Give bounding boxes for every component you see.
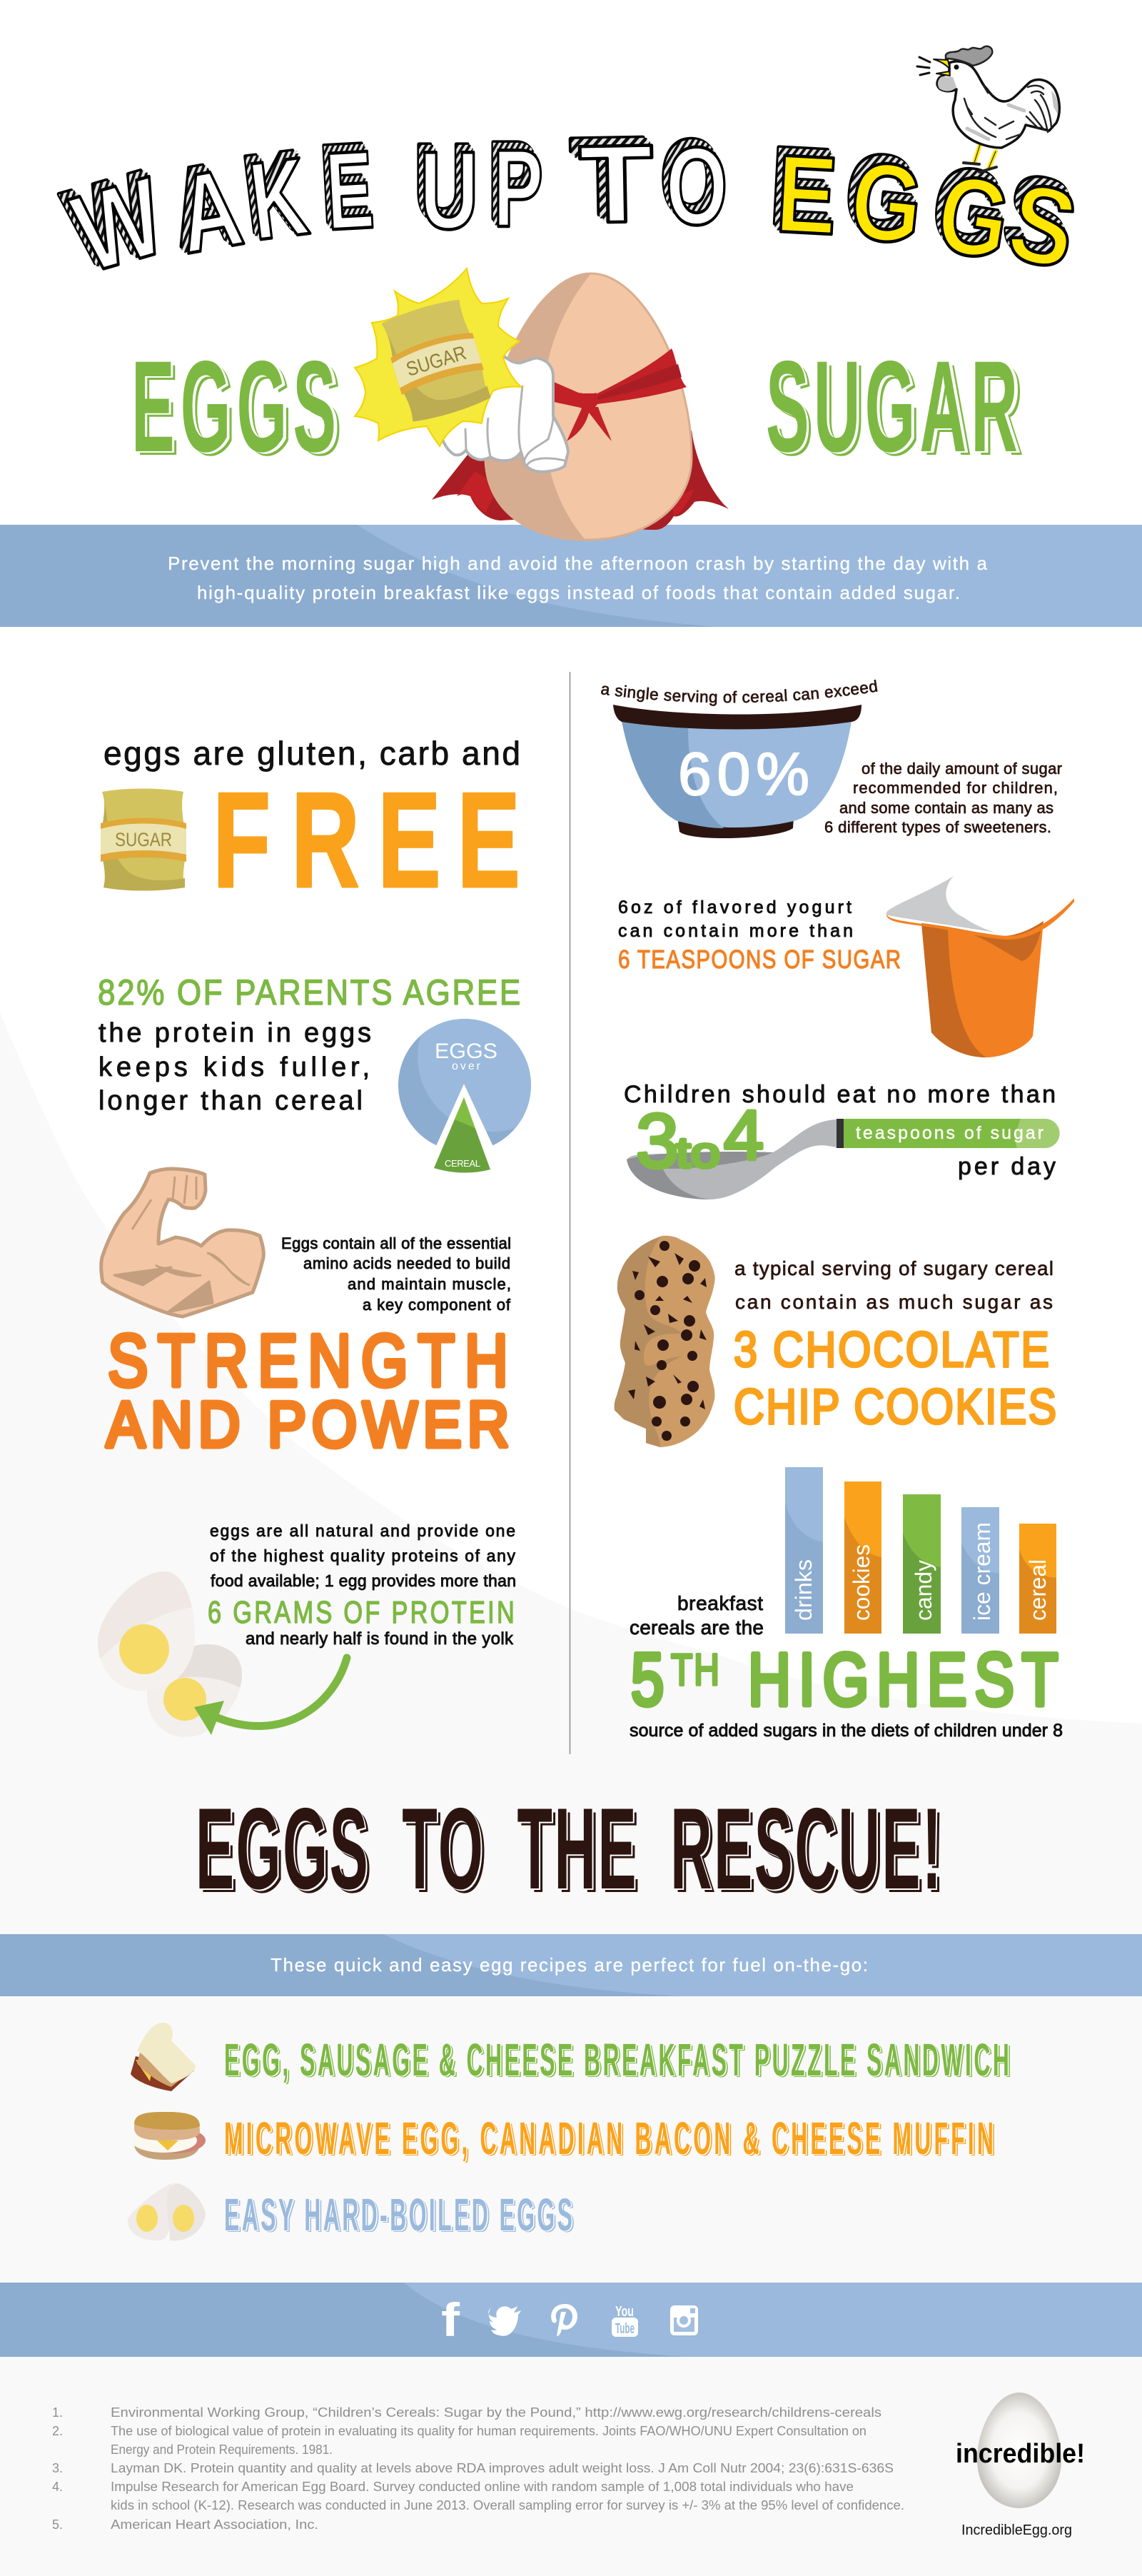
icon: spoon with 3 to 4: to — [676, 1129, 720, 1177]
banner: social icons — [0, 2283, 1142, 2357]
chart: added sugar bars — [785, 1467, 1056, 1634]
title: wake up to eggs: O — [662, 119, 724, 242]
text: typical serving — [734, 1257, 1053, 1313]
banner: social icons: f — [441, 2293, 460, 2346]
title: wake up to eggs: W — [61, 154, 177, 296]
title: wake up to eggs: G — [924, 141, 1013, 275]
title: wake up to eggs: W — [52, 149, 168, 291]
chart: added sugar bars: cereal — [1025, 1559, 1051, 1621]
heading: easy hard-boiled eggs: EASY HARD-BOILED EGGS — [224, 2189, 572, 2240]
title: wake up to eggs: E — [318, 119, 371, 246]
title: wake up to eggs: K — [241, 132, 312, 261]
heading: sugar: SUGAR — [768, 336, 1021, 481]
title: wake up to eggs — [52, 114, 1088, 298]
chart: eggs over cereal pie: over — [452, 1060, 481, 1072]
footnotes: 1. — [52, 2405, 63, 2420]
heading: sugar: SUGAR — [766, 335, 1018, 479]
title: wake up to eggs: O — [666, 124, 728, 248]
heading: 5th highest: 5 — [631, 1638, 664, 1721]
icon: flexed arm — [101, 1169, 263, 1317]
text: daily amount of sugar — [824, 760, 1062, 836]
heading: strength and power — [106, 1319, 509, 1461]
footnotes: kids in school (K-12). Research was conducted in June 2013. Overall sampling error for survey is +/- 3% at the 95% level of confidence. — [111, 2498, 904, 2512]
banner: social icons: Tube — [615, 2321, 635, 2337]
footnotes: Energy and Protein Requirements. 1981. — [111, 2442, 333, 2457]
text: essential amino acids — [281, 1234, 511, 1314]
text: protein keeps kids fuller: the protein in eggs — [98, 1018, 371, 1048]
footnotes — [52, 2405, 904, 2532]
heading: egg sausage cheese sandwich: EGG, SAUSAGE & CHEESE BREAKFAST PUZZLE SANDWICH — [226, 2036, 1011, 2087]
footnotes: 2. — [52, 2424, 63, 2438]
title: wake up to eggs: U — [414, 121, 473, 244]
text: essential amino acids: amino acids needed to build — [303, 1254, 510, 1272]
title: wake up to eggs: U — [415, 123, 475, 246]
text: essential amino acids: Eggs contain all of the essential — [281, 1234, 511, 1252]
chart: added sugar bars: ice cream — [969, 1522, 995, 1621]
title: wake up to eggs: G — [926, 144, 1014, 277]
heading: microwave egg muffin: MICROWAVE EGG, CANADIAN BACON & CHEESE MUFFIN — [224, 2113, 994, 2164]
heading: eggs to the rescue: EGGS TO THE RESCUE! — [196, 1785, 941, 1913]
footnotes: 4. — [52, 2480, 63, 2494]
title: wake up to eggs: A — [166, 142, 248, 275]
title: wake up to eggs: P — [487, 119, 538, 243]
banner: recipes intro — [0, 1934, 1142, 1996]
logo: incredible egg: incredible! — [956, 2439, 1085, 2469]
title: wake up to eggs: A — [169, 145, 251, 277]
footnotes: Impulse Research for American Egg Board. Survey conducted online with random sample of 1,008 total individuals who have — [111, 2480, 854, 2494]
text: typical serving: can contain as much sugar as — [735, 1291, 1053, 1313]
text: flavored yogurt: 6oz of flavored yogurt — [618, 897, 852, 917]
illustration: superhero egg punching sugar: SUGAR — [403, 341, 469, 381]
text: protein keeps kids fuller — [98, 1018, 371, 1116]
footnotes: American Heart Association, Inc. — [111, 2517, 318, 2532]
title: wake up to eggs: G — [839, 130, 922, 260]
text: eggs are gluten, carb and: eggs are gluten, carb and — [103, 735, 520, 772]
heading: easy hard-boiled eggs: EASY HARD-BOILED EGGS — [226, 2190, 575, 2242]
title: wake up to eggs: E — [323, 127, 377, 253]
text: per day: per day — [958, 1153, 1056, 1180]
banner: intro: high-quality protein breakfast like eggs instead of foods that contain added sugar. — [197, 582, 960, 603]
banner: intro — [0, 525, 1142, 627]
heading: 3 chocolate chip cookies: CHIP COOKIES — [734, 1378, 1056, 1434]
logo: incredible egg — [956, 2393, 1085, 2538]
heading: eggs: EGGS — [133, 336, 340, 481]
text: breakfast cereals are the — [630, 1592, 764, 1639]
title: wake up to eggs: S — [997, 155, 1085, 289]
banner: recipes intro: These quick and easy egg recipes are perfect for fuel on-the-go: — [271, 1954, 868, 1976]
illustration: superhero egg punching sugar — [355, 268, 729, 543]
text: daily amount of sugar: of the daily amount of sugar — [861, 760, 1062, 778]
icon: spoon with 3 to 4: teaspoons of sugar — [856, 1123, 1044, 1143]
title: wake up to eggs: T — [575, 119, 651, 243]
icon: rooster — [917, 46, 1059, 172]
text: children should eat: Children should eat no more than — [624, 1081, 1056, 1108]
text: natural protein: food available; 1 egg provides more than — [211, 1571, 516, 1590]
title: wake up to eggs: E — [319, 121, 373, 248]
title: wake up to eggs: G — [929, 150, 1018, 283]
footnotes: Layman DK. Protein quantity and quality at levels above RDA improves adult weight loss. J Am Coll Nutr 2004; 23(6):631S-636S — [111, 2461, 894, 2475]
arrow: pointing to yolk — [194, 1658, 347, 1735]
text: protein keeps kids fuller: keeps kids fuller, — [98, 1052, 370, 1082]
title: wake up to eggs: O — [660, 116, 722, 240]
title: wake up to eggs: K — [243, 135, 314, 263]
footnotes: The use of biological value of protein in evaluating its quality for human requirements. Joints FAO/WHO/UNU Expert Consultation on — [111, 2424, 866, 2438]
title: wake up to eggs: P — [493, 127, 543, 251]
text: natural protein — [210, 1521, 516, 1590]
heading: eggs to the rescue: EGGS TO THE RESCUE! — [197, 1786, 943, 1915]
heading: 3 chocolate chip cookies — [734, 1321, 1056, 1434]
heading: eggs: EGGS — [136, 338, 342, 483]
heading: microwave egg muffin: MICROWAVE EGG, CANADIAN BACON & CHEESE MUFFIN — [226, 2114, 996, 2165]
title: wake up to eggs: S — [999, 159, 1087, 293]
icon: spoon with 3 to 4: 3 — [636, 1097, 679, 1184]
heading: 6 teaspoons of sugar: 6 TEASPOONS OF SUGAR — [618, 945, 901, 974]
title: wake up to eggs: A — [162, 138, 243, 271]
heading: free: FREE — [213, 765, 520, 916]
text: daily amount of sugar: 6 different types of sweeteners. — [824, 818, 1051, 836]
text: breakfast cereals are the: cereals are the — [630, 1616, 764, 1639]
chart: added sugar bars: candy — [911, 1560, 936, 1621]
icon: sugar bag: SUGAR — [115, 829, 172, 850]
title: wake up to eggs: P — [489, 121, 540, 245]
title: wake up to eggs: U — [420, 129, 479, 252]
icon: cereal bowl 60%: 60% — [678, 740, 809, 807]
title: wake up to eggs: W — [58, 152, 174, 294]
text: typical serving: a typical serving of sugary cereal — [734, 1257, 1053, 1279]
title: wake up to eggs: U — [418, 126, 477, 249]
text: essential amino acids: a key component of — [363, 1296, 511, 1314]
title: wake up to eggs: S — [995, 151, 1083, 286]
heading: egg sausage cheese sandwich: EGG, SAUSAGE & CHEESE BREAKFAST PUZZLE SANDWICH — [224, 2034, 1009, 2086]
icon: cereal bowl 60% — [613, 705, 861, 838]
text: daily amount of sugar: recommended for children, — [853, 779, 1058, 797]
footnotes: 5. — [52, 2517, 63, 2532]
title: wake up to eggs: E — [771, 129, 838, 256]
icon: egg muffin — [131, 2112, 206, 2160]
text: daily amount of sugar: and some contain as many as — [839, 799, 1053, 817]
title: wake up to eggs: E — [773, 132, 840, 258]
heading: microwave egg muffin: MICROWAVE EGG, CANADIAN BACON & CHEESE MUFFIN — [226, 2113, 995, 2165]
logo: incredible egg: IncredibleEgg.org — [961, 2522, 1072, 2538]
heading: eggs to the rescue: EGGS TO THE RESCUE! — [199, 1788, 945, 1917]
heading: egg sausage cheese sandwich: EGG, SAUSAGE & CHEESE BREAKFAST PUZZLE SANDWICH — [226, 2035, 1011, 2086]
title: wake up to eggs: E — [767, 124, 834, 251]
title: wake up to eggs: K — [239, 129, 309, 258]
icon: spoon with 3 to 4 — [627, 1096, 1059, 1199]
title: wake up to eggs: P — [491, 124, 541, 248]
chart: eggs over cereal pie: EGGS — [435, 1040, 497, 1063]
chart: eggs over cereal pie — [398, 1019, 531, 1172]
footnotes: 3. — [52, 2461, 63, 2475]
heading: 6 grams of protein: 6 GRAMS OF PROTEIN — [208, 1595, 515, 1630]
title: wake up to eggs: E — [321, 124, 375, 251]
heading: strength and power: AND POWER — [106, 1389, 509, 1461]
title: wake up to eggs: E — [769, 126, 836, 253]
title: wake up to eggs: G — [843, 135, 926, 266]
text: single serving curved: a single serving of cereal can exceed — [601, 680, 878, 706]
title: wake up to eggs: T — [572, 116, 648, 241]
icon: halved eggs — [98, 1571, 242, 1737]
heading: sugar: SUGAR — [770, 338, 1024, 483]
text: source of added sugars: source of added sugars in the diets of children under 8 — [630, 1721, 1063, 1741]
heading: strength and power: STRENGTH — [108, 1319, 508, 1402]
chart: added sugar bars: cookies — [849, 1544, 874, 1621]
heading: eggs: EGGS — [131, 335, 336, 479]
title: wake up to eggs: A — [163, 140, 245, 273]
title: wake up to eggs: T — [569, 114, 646, 238]
footnotes: Environmental Working Group, “Children’s Cereals: Sugar by the Pound,” http://www.ewg.org/research/childrens-cereals — [111, 2405, 881, 2420]
chart: added sugar bars: drinks — [791, 1559, 817, 1621]
text: flavored yogurt — [618, 897, 853, 941]
text: breakfast cereals are the: breakfast — [677, 1592, 763, 1614]
text: flavored yogurt: can contain more than — [618, 921, 853, 941]
text: protein keeps kids fuller: longer than cereal — [98, 1086, 363, 1116]
text: essential amino acids: and maintain muscle, — [348, 1275, 511, 1293]
heading: 5th highest: HIGHEST — [748, 1638, 1058, 1721]
title: wake up to eggs: G — [928, 147, 1016, 280]
heading: 3 chocolate chip cookies: 3 CHOCOLATE — [734, 1321, 1049, 1377]
text: half in the yolk: and nearly half is found in the yolk — [246, 1629, 514, 1649]
chart: eggs over cereal pie: CEREAL — [445, 1158, 480, 1169]
title: wake up to eggs: W — [54, 150, 171, 292]
heading: 5th highest: TH — [671, 1645, 719, 1694]
icon: yogurt cup — [886, 876, 1074, 1057]
title: wake up to eggs: K — [237, 128, 308, 256]
banner: intro: Prevent the morning sugar high and avoid the afternoon crash by starting the day with a — [168, 553, 988, 574]
text: natural protein: of the highest quality proteins of any — [210, 1546, 515, 1565]
icon: breakfast sandwich — [131, 2023, 196, 2091]
title: wake up to eggs: T — [578, 121, 655, 246]
text: natural protein: eggs are all natural and provide one — [210, 1521, 515, 1540]
title: wake up to eggs: G — [845, 139, 928, 268]
title: wake up to eggs: S — [994, 149, 1082, 283]
icon: hard-boiled eggs — [128, 2183, 206, 2240]
icon: spoon with 3 to 4: 4 — [724, 1096, 764, 1174]
icon: stack of cookies — [615, 1236, 715, 1447]
heading: 82% of parents agree: 82% OF PARENTS AGREE — [98, 972, 520, 1012]
banner: social icons: You — [615, 2304, 634, 2320]
icon: sugar bag — [101, 788, 186, 891]
title: wake up to eggs: G — [841, 132, 924, 262]
heading: easy hard-boiled eggs: EASY HARD-BOILED EGGS — [226, 2190, 574, 2241]
title: wake up to eggs: O — [664, 121, 726, 245]
